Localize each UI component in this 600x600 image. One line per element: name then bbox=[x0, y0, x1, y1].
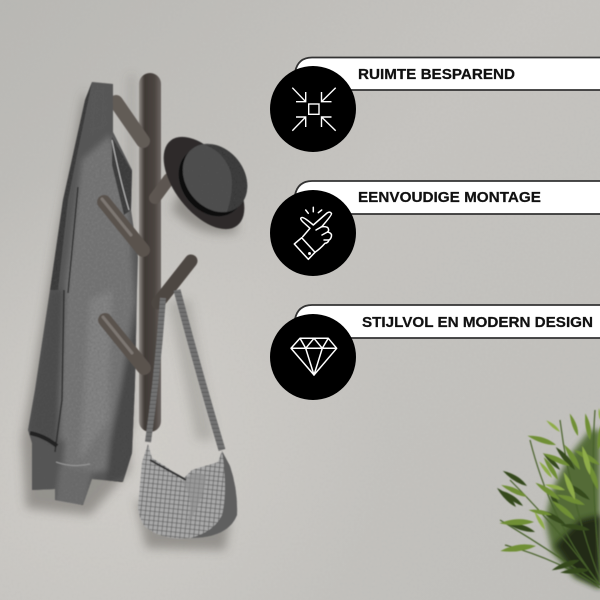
front pegs bbox=[102, 199, 191, 368]
label: EENVOUDIGE MONTAGE bbox=[358, 190, 541, 206]
banner bbox=[295, 305, 600, 338]
feature: stijlvol en modern design bbox=[270, 305, 600, 400]
jacket bbox=[28, 82, 138, 506]
icon: snapping hand bbox=[294, 207, 332, 259]
badge circle bbox=[270, 66, 356, 152]
cast shadows bbox=[22, 75, 238, 550]
handbag bbox=[138, 290, 237, 538]
coat rack with clothes bbox=[20, 73, 261, 550]
jacket folds bbox=[30, 140, 129, 506]
rack post bbox=[139, 73, 161, 432]
badge circle bbox=[270, 314, 356, 400]
plant bbox=[495, 408, 600, 588]
label: RUIMTE BESPAREND bbox=[358, 67, 515, 83]
badge circle bbox=[270, 190, 356, 276]
icon: diamond bbox=[291, 338, 337, 375]
banner bbox=[295, 58, 600, 90]
feature: ruimte besparend bbox=[270, 58, 600, 152]
label: STIJLVOL EN MODERN DESIGN bbox=[362, 315, 593, 331]
rear pegs bbox=[116, 102, 169, 198]
icon: arrows to centre bbox=[292, 88, 336, 131]
feature: eenvoudige montage bbox=[270, 181, 600, 276]
hat bbox=[162, 136, 248, 230]
banner bbox=[295, 181, 600, 214]
jacket tonal patches bbox=[29, 136, 136, 504]
